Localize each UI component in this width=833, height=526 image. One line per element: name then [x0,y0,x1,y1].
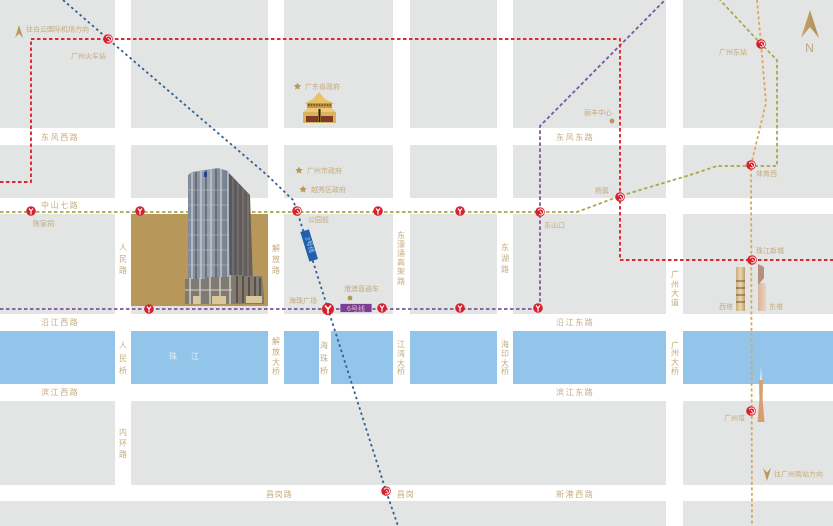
road labels: 东风东路 [556,132,594,142]
icon: canton tower [758,366,764,422]
vertical road and bridge labels: 州 [671,348,679,358]
place labels: 广东省政府 [305,82,340,91]
tower logo [204,172,207,177]
place labels: 体育西 [756,169,777,178]
vertical road and bridge labels: 桥 [272,366,280,376]
icon: temple, provincial government [302,92,336,123]
icon: 6 line badge [340,304,372,313]
river label: 珠 [169,351,177,361]
icon: south station direction arrow [763,468,771,481]
place labels: 往广州南站方向 [774,470,823,478]
icon: location dots [348,119,614,300]
vertical road and bridge labels: 大 [397,358,405,368]
vertical road and bridge labels: 解 [272,243,280,253]
place labels: 广州东站 [719,48,747,56]
vertical road and bridge labels: 道 [671,298,679,308]
vertical road and bridge labels: 路 [397,276,405,286]
icon: 2 line badge: 2号线 [303,235,317,254]
vertical road and bridge labels: 路 [501,264,509,274]
vertical road and bridge labels: 环 [119,439,127,448]
vertical road and bridge labels: 民 [119,254,127,264]
metro line 5: red [0,39,833,260]
stations [26,34,766,496]
vertical road and bridge labels: 广 [671,340,679,350]
tower front facade [188,168,230,284]
metro line 1: olive [0,0,777,212]
river label [169,351,199,361]
vertical road and bridge labels: 珠 [320,353,328,363]
road labels [41,132,594,499]
road labels: 滨江东路 [556,387,594,397]
vertical road and bridge labels: 湖 [501,254,509,263]
vertical road and bridge labels: 桥 [320,366,328,376]
vertical road and bridge labels: 桥 [119,366,127,376]
place labels: 广州火车站 [71,52,106,60]
road labels: 滨江西路 [41,387,79,397]
vertical road and bridge labels: 民 [119,354,127,363]
metro line 6: purple [0,0,665,309]
place labels: 陈家祠 [33,219,54,228]
vertical road and bridge labels: 高 [397,257,405,267]
place labels: 广州塔 [724,414,745,422]
vertical road and bridge labels: 濠 [397,239,405,249]
vertical road and bridge labels: 桥 [501,366,509,376]
road labels: 昌岗 [397,490,415,499]
vertical road and bridge labels: 大 [501,358,509,368]
place labels: 越秀区政府 [311,185,346,194]
vertical road and bridge labels: 州 [671,280,679,289]
vertical road and bridge labels: 广 [671,269,679,279]
road labels: 沿江东路 [556,317,594,327]
place labels: 往白云国际机场方向 [26,24,89,34]
building tower [185,168,264,304]
place labels: 东塔 [769,302,783,311]
vertical road and bridge labels: 海 [320,340,328,350]
icon: 6 line badge: 6号线 [347,304,365,313]
road labels: 沿江西路 [41,317,79,327]
icon: star markers [294,82,307,193]
river label: 江 [191,352,199,361]
vertical road and bridge labels: 桥 [397,366,405,376]
vertical road and bridge labels: 架 [397,267,405,276]
place labels: 杨箕 [595,186,609,195]
vertical road and bridge labels: 人 [119,341,127,350]
compass north arrow: N [805,41,814,55]
vertical road and bridge labels: 东 [501,242,509,252]
metro line 3: orange [751,0,766,526]
place labels: 海珠广场 [289,296,317,305]
place labels: 广州市政府 [307,166,342,175]
vertical road and bridge labels: 人 [119,243,127,252]
road labels: 新港西路 [556,489,594,499]
vertical road and bridge labels: 大 [272,357,280,367]
vertical road and bridge labels: 海 [501,339,509,349]
metro line 2: blue [63,0,398,526]
place labels: 港澳直通车 [344,284,379,293]
podium [185,275,264,304]
icon: 2 line badge [300,229,319,262]
vertical road and bridge labels: 涌 [397,248,405,258]
vertical road and bridge labels: 大 [671,288,679,298]
icon: airport direction arrow [15,25,23,38]
place labels: 公园前 [308,215,329,224]
vertical road and bridge labels: 路 [119,449,127,459]
vertical road and bridge labels: 大 [671,357,679,367]
tower side facade [227,171,253,290]
vertical road and bridge labels: 解 [272,336,280,346]
vertical road and bridge labels: 路 [272,265,280,275]
project site [131,214,268,306]
place labels: 丽丰中心 [584,108,612,117]
vertical road and bridge labels: 桥 [671,366,679,376]
icon: west tower [736,267,745,311]
vertical road and bridge labels: 放 [272,346,280,356]
vertical road and bridge labels: 印 [501,350,509,358]
vertical road and bridge labels [119,230,679,459]
icon: east tower [758,264,766,311]
place labels: 西塔 [719,302,733,311]
vertical road and bridge labels: 路 [119,265,127,275]
road labels: 昌岗路 [266,489,292,499]
compass north arrow [801,10,819,55]
road labels: 东风西路 [41,132,79,142]
river [0,331,833,384]
road labels: 中山七路 [41,200,79,210]
place labels: 珠江新城 [756,246,784,255]
vertical road and bridge labels: 东 [397,230,405,240]
vertical road and bridge labels: 湾 [397,348,405,358]
vertical road and bridge labels: 放 [272,254,280,264]
vertical road and bridge labels: 内 [119,427,127,437]
place labels: 东山口 [544,220,565,230]
vertical road and bridge labels: 江 [397,340,405,349]
